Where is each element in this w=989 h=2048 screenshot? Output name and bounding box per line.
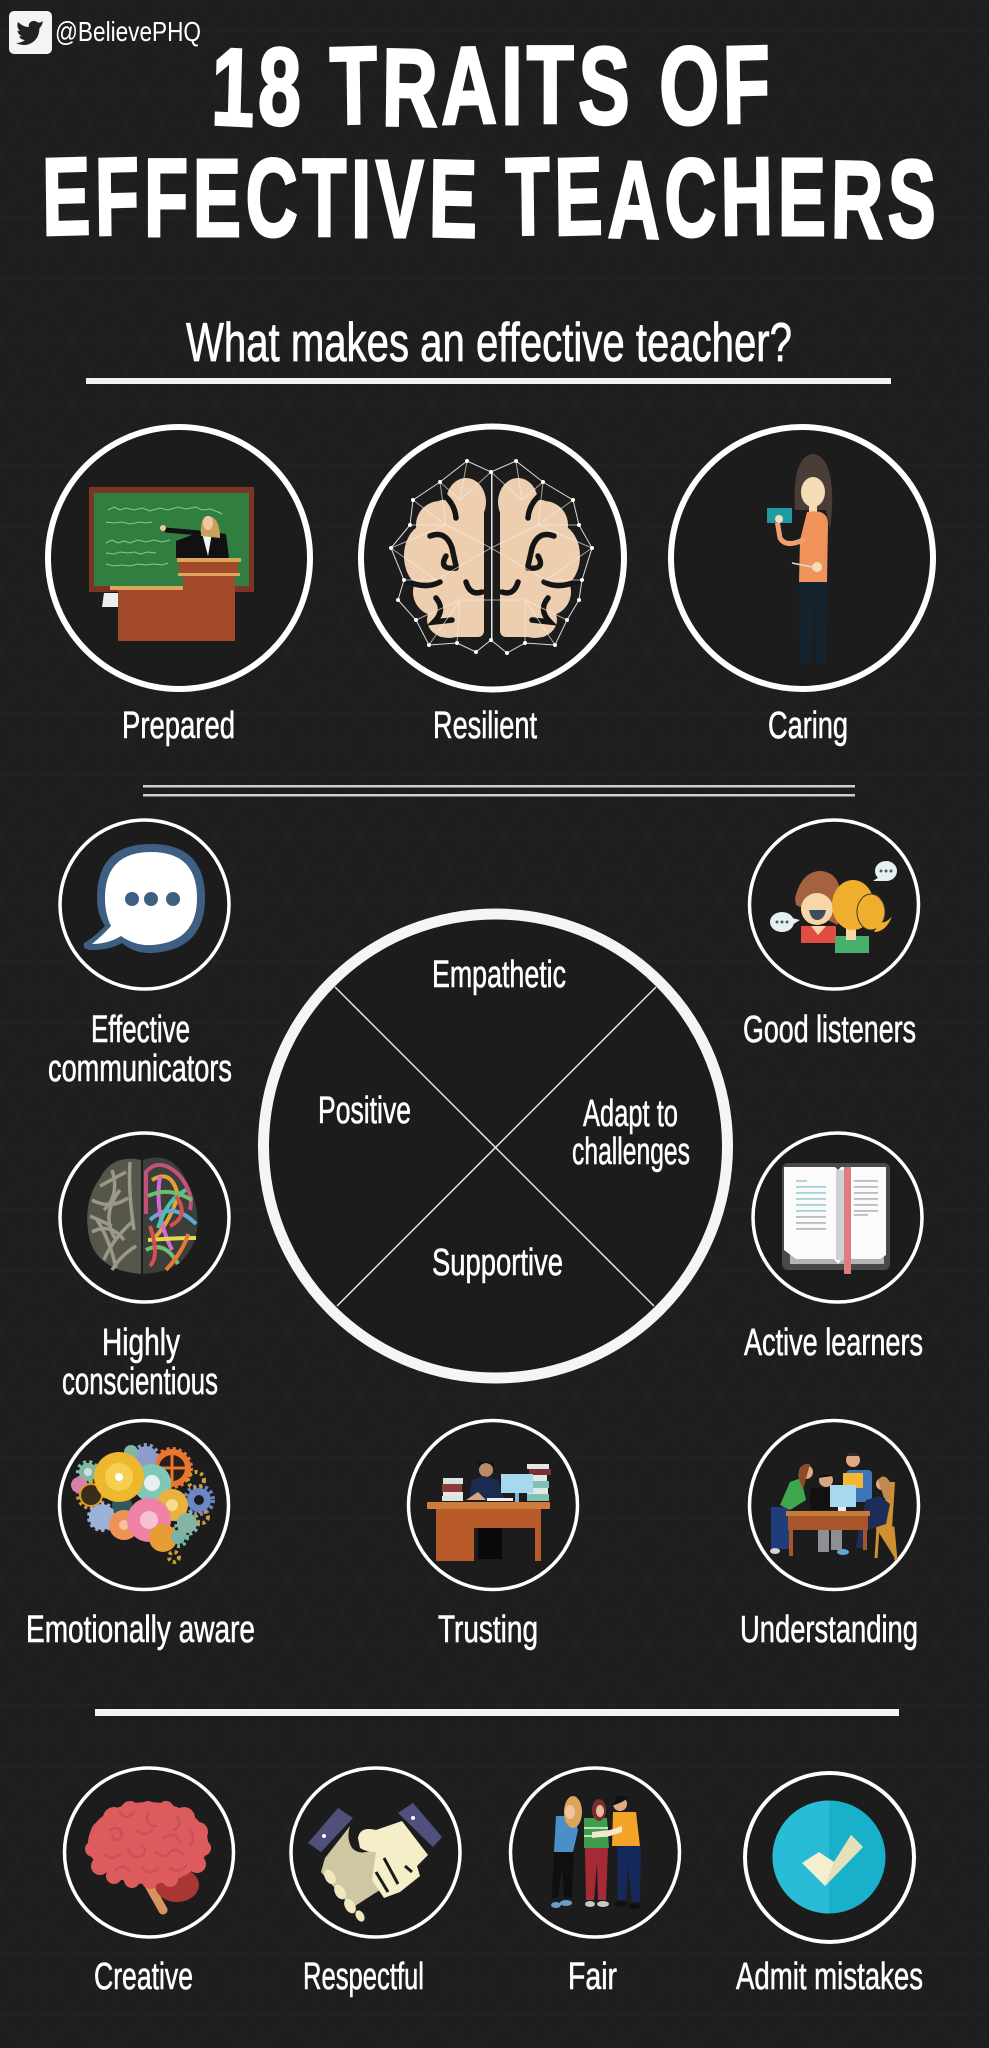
icon: handshake	[308, 1803, 442, 1923]
label: trusting: Trusting	[438, 1609, 538, 1651]
label: highly conscientious: Highly	[102, 1322, 180, 1364]
label: emotionally aware: Emotionally aware	[26, 1609, 255, 1651]
icon: twitter bird	[9, 11, 52, 54]
label: creative: Creative	[94, 1956, 193, 1998]
trait: trusting	[408, 1420, 578, 1590]
label: highly conscientious: conscientious	[62, 1361, 218, 1403]
trait: active learners	[753, 1133, 922, 1302]
icon: teacher at podium	[89, 487, 254, 641]
trait: emotionally aware	[60, 1420, 228, 1590]
trait: understanding	[750, 1420, 918, 1590]
label: effective communicators: Effective	[91, 1009, 190, 1051]
trait: caring	[671, 427, 933, 689]
icon: brain of gears	[71, 1445, 213, 1562]
title: EFFECTIVE TEACHERS	[41, 134, 941, 262]
divider	[95, 1709, 899, 1716]
double divider	[143, 785, 855, 796]
quadrant: empathetic: Empathetic	[432, 954, 566, 996]
label: good listeners: Good listeners	[743, 1009, 916, 1051]
label: effective communicators	[48, 1009, 232, 1090]
icon: person at desk	[427, 1462, 551, 1561]
label: resilient: Resilient	[433, 705, 537, 747]
icon: two-tone wired brain	[87, 1158, 198, 1274]
quadrant: adapt to challenges: challenges	[572, 1131, 690, 1173]
trait: effective communicators	[60, 820, 229, 989]
quadrant: adapt to challenges	[572, 1093, 690, 1173]
handle text: @BelievePHQ	[55, 16, 201, 47]
label: effective communicators: communicators	[48, 1048, 232, 1090]
icon: speech bubble	[84, 844, 205, 953]
quadrant: adapt to challenges: Adapt to	[583, 1093, 678, 1135]
trait: good listeners	[750, 820, 918, 989]
trait: respectful	[291, 1768, 460, 1937]
label: admit mistakes: Admit mistakes	[736, 1956, 923, 1998]
trait: prepared	[48, 427, 310, 689]
divider	[86, 378, 891, 384]
label: highly conscientious	[62, 1322, 218, 1403]
trait: admit mistakes	[745, 1773, 914, 1942]
icon: networked brain	[389, 459, 594, 655]
icon: check badge	[772, 1800, 886, 1914]
icon: open book	[782, 1163, 890, 1274]
title: 18 TRAITS OF	[210, 23, 775, 151]
label: caring: Caring	[768, 705, 848, 747]
trait: fair	[510, 1768, 680, 1937]
label: prepared: Prepared	[122, 705, 235, 747]
trait: resilient	[361, 426, 624, 690]
icon: red brain	[85, 1801, 211, 1910]
quadrant: positive: Positive	[318, 1090, 411, 1132]
label: active learners: Active learners	[744, 1322, 923, 1364]
twitter handle	[9, 11, 201, 54]
icon: two people talking	[770, 861, 897, 953]
icon: three people with book	[551, 1795, 641, 1909]
quadrant: supportive: Supportive	[432, 1242, 563, 1284]
icon: woman holding card	[767, 454, 832, 664]
icon: group around table	[770, 1452, 896, 1560]
trait: highly conscientious	[60, 1133, 229, 1302]
trait: creative	[64, 1768, 234, 1937]
label: understanding: Understanding	[740, 1609, 918, 1651]
label: respectful: Respectful	[303, 1956, 424, 1998]
label: fair: Fair	[568, 1956, 617, 1998]
central quadrant wheel	[264, 914, 728, 1378]
title	[41, 23, 941, 262]
